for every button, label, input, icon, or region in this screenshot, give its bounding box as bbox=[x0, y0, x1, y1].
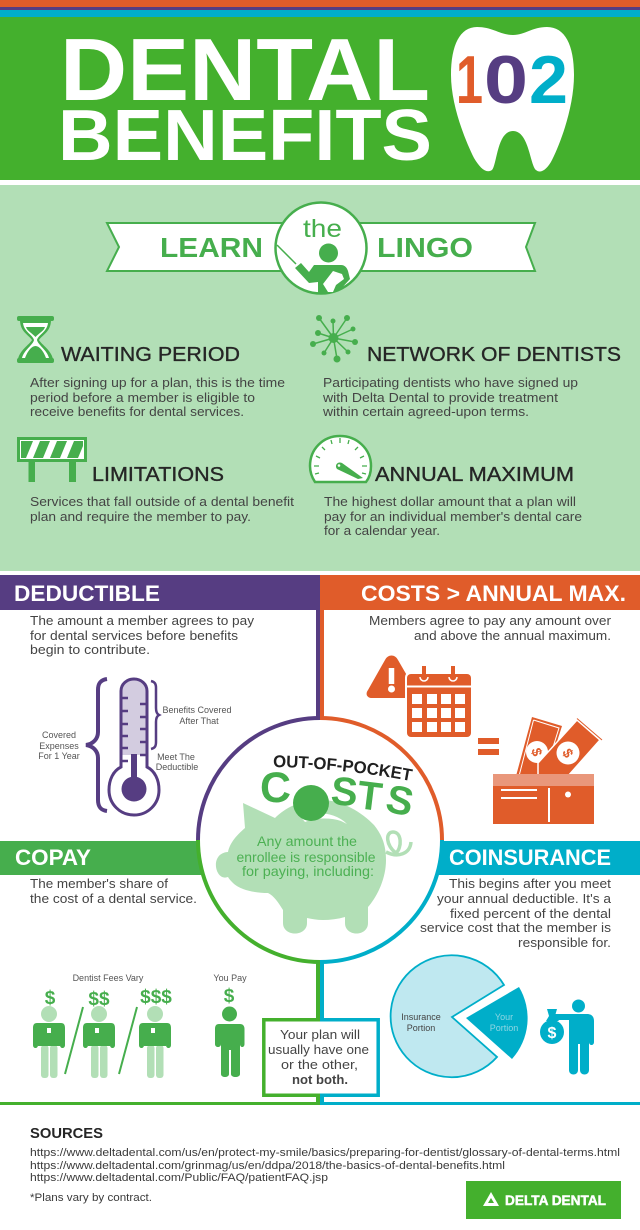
panel: copay: COPAY bbox=[15, 845, 91, 870]
panel: costs over annual max: Members agree to pay any amount over bbox=[369, 613, 612, 628]
pie chart: Portion bbox=[490, 1023, 518, 1033]
text: definition bbox=[236, 833, 376, 879]
icon: money in wallet: $ bbox=[528, 746, 546, 758]
icon: teacher with pointer bbox=[277, 244, 350, 293]
panel: coinsurance: service cost that the member is bbox=[420, 920, 612, 935]
icon: tooth with 102: 2 bbox=[529, 42, 568, 118]
icon: thermometer with braces: Covered bbox=[42, 730, 76, 740]
icon: money in wallet bbox=[493, 717, 602, 824]
icon: dentists with varying fees bbox=[33, 973, 172, 1078]
text: definition: for paying, including: bbox=[242, 863, 374, 879]
icon: dentists with varying fees: $$ bbox=[88, 989, 110, 1010]
icon: dentists with varying fees: $ bbox=[45, 988, 56, 1009]
title bbox=[58, 20, 432, 176]
panel: deductible bbox=[0, 575, 320, 815]
panel: coinsurance bbox=[320, 841, 640, 1105]
term: limitations: LIMITATIONS bbox=[92, 464, 224, 486]
ribbon heading: the bbox=[303, 215, 342, 243]
icon: network bbox=[310, 315, 358, 362]
panel: copay: the cost of a dental service. bbox=[30, 891, 197, 906]
heading: out-of-pocket costs: S bbox=[329, 769, 360, 815]
pie chart: Insurance bbox=[401, 1012, 441, 1022]
sources: https://www.deltadental.com/Public/FAQ/patientFAQ.jsp bbox=[30, 1172, 328, 1184]
header banner bbox=[0, 17, 640, 180]
term: waiting period: receive benefits for dental services. bbox=[30, 404, 244, 419]
top colour stripes bbox=[0, 0, 640, 17]
term: annual maximum: pay for an individual member's dental care bbox=[324, 509, 582, 524]
heading: out-of-pocket costs: C bbox=[260, 764, 291, 812]
term: limitations bbox=[18, 438, 294, 524]
icon: dentists with varying fees: $$$ bbox=[140, 987, 172, 1008]
panel: costs over annual max: COSTS > ANNUAL MAX. bbox=[361, 581, 626, 606]
icon: tooth with 102: 1 bbox=[456, 42, 483, 118]
icon: you pay person bbox=[213, 973, 247, 1077]
callout: one or the other bbox=[264, 1020, 378, 1095]
term: limitations: Services that fall outside of a dental benefit bbox=[30, 494, 294, 509]
panel: coinsurance: fixed percent of the dental bbox=[450, 906, 611, 921]
icon: dentists with varying fees: Dentist Fees Vary bbox=[73, 973, 144, 983]
panel: deductible: begin to contribute. bbox=[30, 642, 150, 657]
sources: SOURCES bbox=[30, 1125, 103, 1142]
term: network of dentists bbox=[310, 315, 621, 419]
panel: coinsurance: COINSURANCE bbox=[449, 845, 611, 870]
icon: you pay person: You Pay bbox=[213, 973, 247, 983]
sources: https://www.deltadental.com/grinmag/us/en/ddpa/2018/the-basics-of-dental-benefits.html bbox=[30, 1160, 505, 1172]
icon: thermometer with braces: Expenses bbox=[39, 741, 79, 751]
icon: gauge bbox=[310, 436, 371, 482]
sources: *Plans vary by contract. bbox=[30, 1192, 152, 1204]
heading: out-of-pocket costs: OUT-OF-POCKET bbox=[274, 755, 413, 780]
icon: thermometer with braces: Deductible bbox=[156, 762, 198, 772]
icon: equals bbox=[478, 738, 499, 755]
term: annual maximum bbox=[310, 436, 582, 538]
term: limitations: plan and require the member to pay. bbox=[30, 509, 251, 524]
pie chart: Portion bbox=[407, 1023, 435, 1033]
callout: one or the other: or the other, bbox=[281, 1057, 358, 1072]
panel: coinsurance: responsible for. bbox=[518, 935, 611, 950]
callout: one or the other: Your plan will bbox=[280, 1027, 360, 1042]
term: annual maximum: ANNUAL MAXIMUM bbox=[375, 464, 574, 486]
text: definition: enrollee is responsible bbox=[236, 849, 376, 865]
title: DENTAL bbox=[60, 20, 430, 119]
icon: warning and calendar bbox=[367, 656, 473, 739]
panel: deductible: for dental services before benefits bbox=[30, 628, 239, 643]
icon: thermometer with braces: After That bbox=[179, 716, 219, 726]
icon: person with money bag bbox=[540, 1000, 594, 1074]
logo: delta dental bbox=[466, 1181, 621, 1219]
panel: out-of-pocket costs circle bbox=[196, 716, 444, 964]
panel: deductible: The amount a member agrees to pay bbox=[30, 613, 255, 628]
term: network of dentists: with Delta Dental to provide treatment bbox=[322, 390, 558, 405]
term: waiting period: WAITING PERIOD bbox=[61, 344, 240, 366]
icon: person with money bag: $ bbox=[548, 1025, 557, 1042]
term: waiting period: period before a member is eligible to bbox=[30, 390, 255, 405]
term: network of dentists: within certain agreed-upon terms. bbox=[322, 404, 529, 419]
text: definition: Any amount the bbox=[257, 833, 357, 849]
logo: delta dental: DELTA DENTAL bbox=[505, 1192, 606, 1208]
icon: thermometer with braces: For 1 Year bbox=[38, 751, 80, 761]
callout: one or the other: usually have one bbox=[268, 1042, 369, 1057]
term: annual maximum: for a calendar year. bbox=[324, 523, 440, 538]
panel: coinsurance: your annual deductible. It's a bbox=[437, 891, 612, 906]
heading: out-of-pocket costs: S bbox=[382, 777, 417, 825]
panel: copay bbox=[0, 841, 320, 1105]
heading: out-of-pocket costs bbox=[260, 755, 417, 825]
icon: piggy bank bbox=[216, 800, 411, 934]
pie chart bbox=[391, 955, 528, 1077]
ribbon heading: LEARN bbox=[160, 232, 263, 263]
icon: tooth with 102 bbox=[451, 27, 574, 172]
pie chart: Your bbox=[495, 1012, 513, 1022]
term: waiting period bbox=[17, 316, 285, 419]
icon: thermometer with braces bbox=[38, 679, 232, 815]
icon: thermometer with braces: Meet The bbox=[157, 752, 195, 762]
callout: one or the other: not both. bbox=[292, 1072, 348, 1087]
term: network of dentists: Participating dentists who have signed up bbox=[323, 375, 578, 390]
icon: tooth with 102: 0 bbox=[484, 42, 528, 118]
panel: costs over annual max: and above the annual maximum. bbox=[414, 628, 611, 643]
ribbon heading: LINGO bbox=[377, 232, 473, 263]
heading: out-of-pocket costs: T bbox=[355, 773, 385, 820]
panel: costs over annual max bbox=[320, 575, 640, 824]
icon: hourglass bbox=[17, 316, 54, 363]
icon: you pay person: $ bbox=[224, 986, 235, 1007]
term: waiting period: After signing up for a plan, this is the time bbox=[30, 375, 285, 390]
title: BENEFITS bbox=[58, 96, 432, 176]
panel: copay: The member's share of bbox=[30, 876, 168, 891]
icon: barrier bbox=[18, 438, 86, 482]
term: annual maximum: The highest dollar amount that a plan will bbox=[324, 494, 576, 509]
sources bbox=[30, 1125, 620, 1204]
panel: learn the lingo bbox=[0, 185, 640, 571]
icon: thermometer with braces: Benefits Covered bbox=[162, 705, 232, 715]
term: network of dentists: NETWORK OF DENTISTS bbox=[367, 344, 621, 366]
panel: coinsurance: This begins after you meet bbox=[449, 876, 611, 891]
sources: https://www.deltadental.com/us/en/protect-my-smile/basics/preparing-for-dentist/glossary-of-dental-terms.html bbox=[30, 1147, 620, 1159]
icon: money in wallet: $ bbox=[559, 746, 577, 761]
ribbon heading bbox=[107, 202, 535, 294]
panel: deductible: DEDUCTIBLE bbox=[14, 581, 160, 606]
